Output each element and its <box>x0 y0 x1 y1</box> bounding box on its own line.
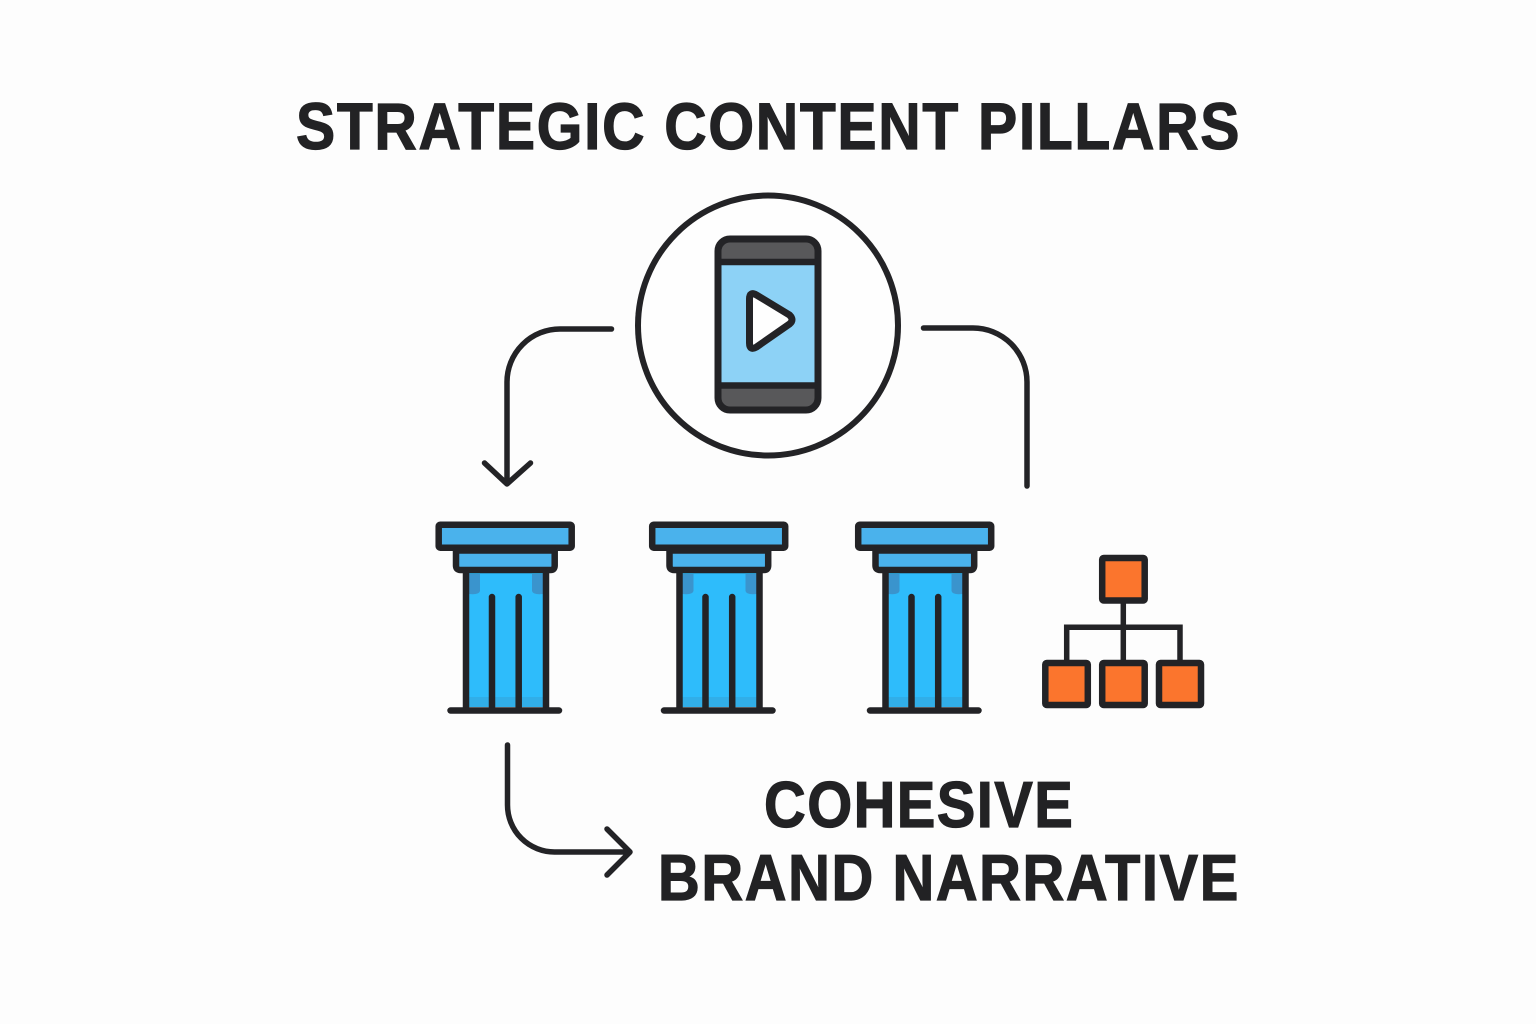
connector: phone to organization chart <box>924 328 1027 486</box>
circle outline <box>638 196 898 456</box>
title: STRATEGIC CONTENT PILLARS <box>296 90 1239 164</box>
label: cohesive brand narrative <box>658 769 1238 915</box>
arrow: phone to first pillar <box>484 329 612 484</box>
pillar 2 <box>652 525 785 710</box>
icon: organization chart <box>1045 558 1201 705</box>
pillar 1 <box>439 525 572 710</box>
pillar 3 <box>858 525 991 710</box>
arrow: pillars to brand narrative <box>508 745 630 875</box>
label: cohesive brand narrative: COHESIVE <box>764 769 1073 842</box>
icon: phone <box>718 239 818 410</box>
icon: play triangle <box>750 294 792 348</box>
label: cohesive brand narrative: BRAND NARRATIVE <box>658 842 1238 915</box>
icon: phone with play button in circle <box>638 196 898 456</box>
